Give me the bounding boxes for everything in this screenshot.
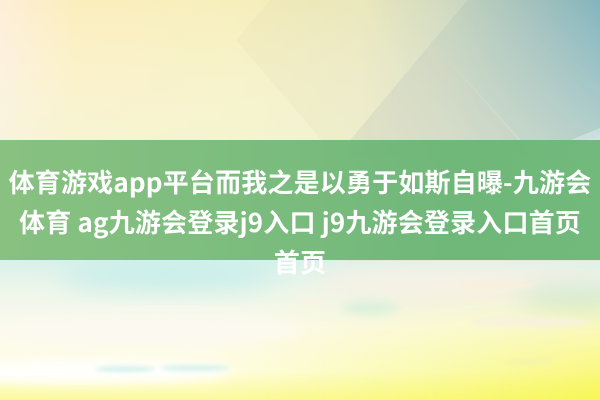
title: 体育 ag九游会登录j9入口 j9九游会登录入口首页: [19, 203, 581, 240]
lower sky with clouds: [0, 255, 600, 400]
title: 体育游戏app平台而我之是以勇于如斯自曝-九游会: [9, 163, 591, 200]
geometric facets: [236, 0, 600, 157]
title: [9, 163, 591, 280]
title: 首页: [274, 243, 326, 280]
upper sky gradient: [0, 0, 600, 145]
warm tint at right of the band edge: [345, 255, 600, 261]
green title band: [0, 140, 600, 260]
